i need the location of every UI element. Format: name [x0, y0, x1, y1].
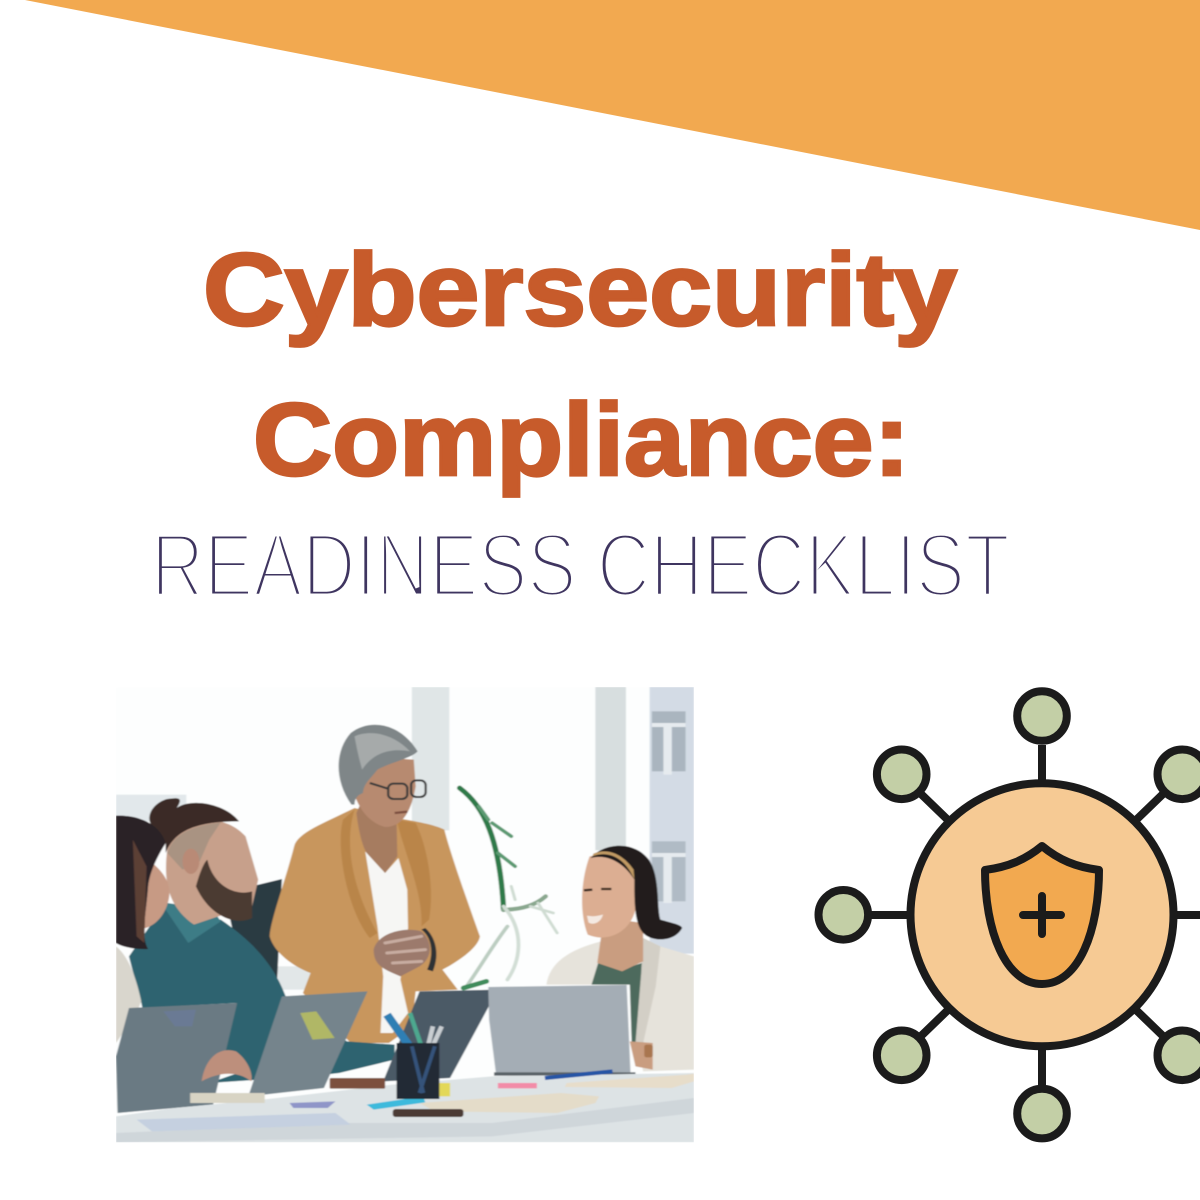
- standing woman in tan jacket: [270, 725, 480, 1043]
- bearded man in teal shirt: [129, 798, 395, 1083]
- woman at far left: [116, 816, 169, 1043]
- pen holder: [387, 1013, 450, 1099]
- monitor behind the man: [225, 879, 282, 980]
- green nodes: [818, 691, 1200, 1138]
- smiling woman at right: [546, 846, 694, 1071]
- plant: [460, 788, 557, 988]
- central circle: [910, 783, 1174, 1046]
- photo: team meeting around a table: [116, 687, 694, 1142]
- laptops: [116, 985, 635, 1113]
- orange corner banner: [25, 0, 1200, 230]
- shield: [985, 846, 1099, 984]
- title: [203, 232, 957, 497]
- connector spokes: [870, 745, 1200, 1085]
- network shield icon: [818, 691, 1200, 1138]
- white conference table: [116, 1073, 694, 1142]
- subtitle: READINESS CHECKLIST: [151, 516, 1010, 616]
- title: Compliance:: [253, 382, 910, 497]
- notebooks and desk items: [137, 1071, 694, 1131]
- man's hand on keyboard: [202, 1050, 252, 1081]
- office window background: [116, 687, 694, 1142]
- plus sign: [1023, 896, 1061, 934]
- title: Cybersecurity: [203, 232, 957, 347]
